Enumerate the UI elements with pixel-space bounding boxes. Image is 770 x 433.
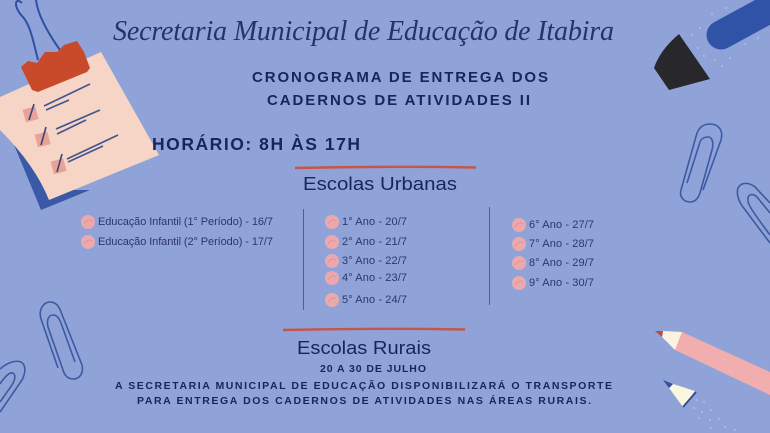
list: 1 a 5 ano	[325, 215, 407, 307]
icon: clipboard note with checklist	[0, 0, 159, 210]
icon: pink pencil	[655, 331, 770, 395]
icon: small pencil tip	[663, 380, 736, 431]
list: 1 a 5 ano: 2° Ano - 21/7	[342, 236, 407, 248]
heading: cronograma: CADERNOS DE ATIVIDADES II	[267, 92, 530, 109]
list: educacao infantil	[81, 215, 273, 249]
icon: paperclip left lower	[0, 361, 25, 412]
text: rurais details: PARA ENTREGA DOS CADERNOS DE ATIVIDADES NAS ÁREAS RURAIS.	[137, 394, 591, 407]
list: 1 a 5 ano: 5° Ano - 24/7	[342, 294, 407, 306]
text: rurais details: 20 A 30 DE JULHO	[320, 363, 426, 375]
list: educacao infantil: Educação Infantil (2° Período) - 17/7	[98, 236, 273, 248]
divider right	[488, 207, 490, 305]
heading: escolas rurais: Escolas Rurais	[297, 338, 431, 358]
icon: paperclip right lower	[737, 183, 770, 243]
icon: marker pen	[654, 0, 770, 90]
list: 1 a 5 ano: 4° Ano - 23/7	[342, 272, 407, 284]
list: 6 a 9 ano: 6° Ano - 27/7	[529, 219, 594, 231]
divider left	[302, 209, 304, 310]
list: 1 a 5 ano: 1° Ano - 20/7	[342, 216, 407, 228]
list: 6 a 9 ano: 9° Ano - 30/7	[529, 277, 594, 289]
icon: paperclip left upper	[40, 302, 82, 379]
text: rurais details	[115, 363, 612, 407]
list: 6 a 9 ano	[512, 218, 594, 290]
text: rurais details: A SECRETARIA MUNICIPAL DE EDUCAÇÃO DISPONIBILIZARÁ O TRANSPORTE	[115, 379, 612, 392]
heading: escolas urbanas: Escolas Urbanas	[303, 174, 457, 194]
list: educacao infantil: Educação Infantil (1° Período) - 16/7	[98, 216, 273, 228]
list: 6 a 9 ano: 8° Ano - 29/7	[529, 257, 594, 269]
icon: paperclip right upper	[681, 124, 722, 202]
heading: cronograma: CRONOGRAMA DE ENTREGA DOS	[252, 69, 548, 86]
list: 1 a 5 ano: 3° Ano - 22/7	[342, 255, 407, 267]
title: Secretaria Municipal de Educação de Itabira	[113, 16, 614, 47]
heading: cronograma	[252, 69, 548, 109]
list: 6 a 9 ano: 7° Ano - 28/7	[529, 238, 594, 250]
text: horario: HORÁRIO: 8H ÀS 17H	[152, 133, 360, 154]
